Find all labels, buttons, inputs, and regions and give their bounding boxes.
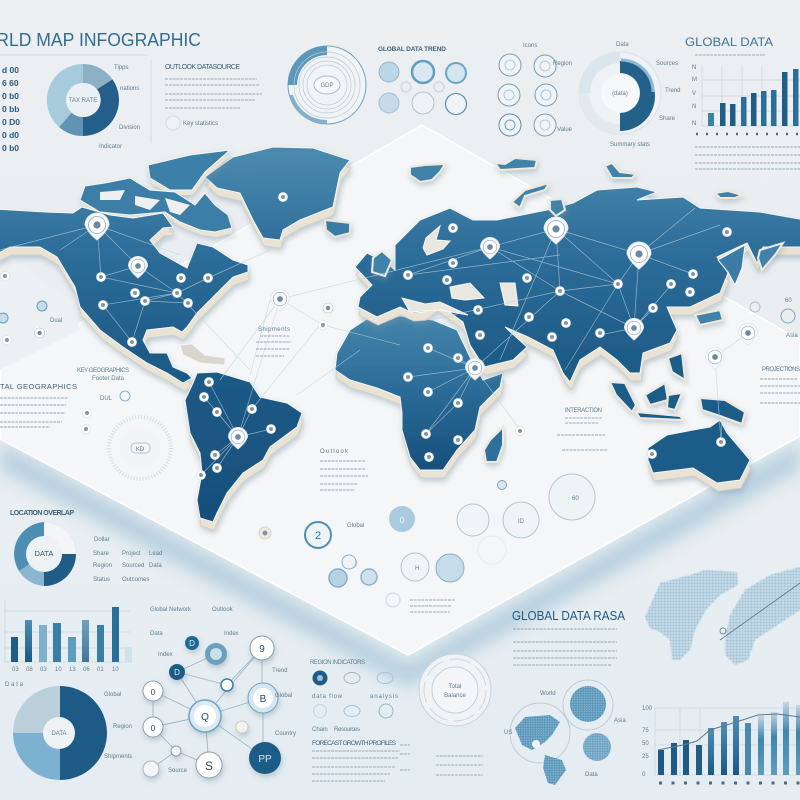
network diagram: Source [168, 768, 188, 774]
text block: top right [695, 147, 800, 169]
network diagram: S [205, 759, 213, 773]
legend: lower-left donut [93, 537, 162, 583]
radial chart: right: Share [659, 116, 676, 122]
donut chart: lower-left [14, 522, 76, 586]
bar chart: top right [692, 55, 800, 134]
legend: lower-left donut: Sourced [122, 563, 144, 569]
ring chart: lower centre: Balance [444, 693, 467, 699]
network diagram: 0 [151, 688, 156, 697]
donut chart: TAX RATE [69, 98, 97, 104]
icons: far east: 60 [785, 298, 792, 304]
radial chart: right: Sources [656, 61, 678, 67]
radial chart: right: Data [616, 42, 629, 48]
bubble group: lower paper: 0 [400, 516, 405, 525]
islands: Europe north and Japan [372, 158, 783, 325]
bar chart: top right: V [692, 91, 696, 97]
icon group: six rings [498, 43, 557, 136]
dotted circle [109, 417, 171, 479]
legend: lower-left donut: Project [122, 551, 141, 557]
bar chart: top right: N [692, 121, 696, 127]
radial chart: right [553, 42, 680, 148]
bar chart: lower-left [5, 600, 132, 673]
network diagram: Trend [272, 668, 287, 674]
bubble group: lower paper [259, 506, 415, 607]
network diagram [143, 607, 296, 778]
radial chart: right: Region [553, 61, 572, 67]
continent: Arctic islands [80, 150, 350, 237]
paper sheet [0, 125, 800, 655]
network lines: Americas [0, 225, 490, 475]
panel: top-left donut: Indicator [99, 144, 122, 150]
panel: lower icon list: Chain [312, 727, 328, 733]
icon list: d 00 [2, 65, 19, 75]
bar chart: lower-left: 01 [97, 667, 104, 673]
inland seas [402, 226, 745, 315]
radial chart: right: Value [557, 127, 573, 133]
left side icons: Dual [50, 318, 62, 324]
text block: left geographic: TAL GEOGRAPHICS [0, 382, 77, 391]
ring group: lower paper right: 60 [572, 496, 579, 502]
donut chart: lower-left: DATA [35, 549, 53, 558]
pie chart: lower-left: Global [104, 692, 121, 698]
network diagram: Outlook [212, 607, 234, 613]
text block: left geographic [0, 368, 129, 427]
icon list: 0 D0 [2, 117, 20, 127]
panel: top-left donut [0, 55, 151, 153]
text block: Indian Ocean: INTERACTION [565, 408, 602, 414]
text block: top-left outlook: Key statistics [183, 121, 218, 127]
bar chart: top right: N [692, 65, 696, 71]
legend: lower-left donut: Lead [149, 551, 162, 557]
legend: lower-left donut: Data [149, 563, 162, 569]
network diagram: PP [258, 754, 272, 765]
icon group: six rings: Icons [523, 43, 537, 49]
ring chart: lower centre: Total [449, 684, 461, 690]
icon list: 6 60 [2, 78, 19, 88]
text block: top-left outlook [165, 64, 262, 130]
bar chart: lower-left: 03 [40, 667, 47, 673]
text block: east: PROJECTIONS [762, 367, 800, 373]
pie chart: lower-left [5, 682, 132, 780]
icon group: top middle [378, 46, 466, 114]
ring group: lower paper right: ID [518, 519, 525, 525]
text block: left geographic: Footer Data [92, 376, 125, 382]
bubble group: lower paper: Global [347, 523, 364, 529]
text block: mid Atlantic [256, 327, 291, 356]
icon list: 0 b0 [2, 143, 19, 153]
continent: North America [0, 207, 249, 391]
panel: lower icon list [310, 660, 400, 781]
ocean pins [270, 289, 799, 585]
pie chart: lower-left: Data [5, 682, 24, 688]
bar chart: lower-right [642, 702, 800, 783]
text block: global data [513, 629, 617, 665]
icons: far east [750, 298, 798, 339]
network diagram: Index [224, 631, 239, 637]
text block: mid Atlantic: Shipments [258, 327, 290, 333]
network diagram: D [189, 639, 195, 648]
text block: south Atlantic [320, 449, 368, 490]
left side icons: DUL [100, 396, 113, 402]
mini globes: Asia [614, 718, 626, 724]
network diagram: 9 [259, 644, 265, 655]
map pins: North America [85, 192, 288, 347]
heading: lower-left donut: LOCATION OVERLAP [10, 510, 74, 517]
legend: lower-left donut: Dollar [94, 537, 110, 543]
text block: south Atlantic: Outlook [320, 449, 349, 455]
panel: top-left donut: Division [119, 125, 140, 131]
islands: Southeast Asia [610, 353, 745, 424]
bar chart: lower-left: 10 [112, 667, 119, 673]
text block: east [760, 367, 800, 403]
mini globes: World [540, 691, 556, 697]
text block: left geographic: KEY GEOGRAPHICS [77, 368, 129, 374]
ring group: lower paper right: H [415, 566, 419, 572]
network diagram: Data [150, 631, 163, 637]
radial chart: left: GDP [320, 83, 334, 89]
bar chart: top right: M [692, 77, 697, 83]
donut chart [47, 64, 119, 136]
map pins: Eurasia [403, 217, 732, 342]
text block: lower paper [410, 600, 455, 612]
ring group: lower paper right [401, 474, 595, 582]
mini globes: Data [585, 772, 598, 778]
paper shadow [0, 442, 800, 688]
bar chart: lower-left: 10 [55, 667, 62, 673]
panel: lower icon list: data flow [312, 694, 343, 700]
pie chart: lower-left: DATA [51, 731, 67, 737]
network lines: Eurasia and Africa [408, 208, 748, 442]
legend: lower-left donut: Status [93, 577, 110, 583]
legend: lower-left donut: Region [93, 563, 112, 569]
icon group: top middle: GLOBAL DATA TREND [378, 46, 446, 53]
radial chart: right: Trend [665, 88, 680, 94]
icons: far east: Asia [786, 333, 798, 339]
bar chart: lower-right: 100 [642, 706, 653, 712]
island: Madagascar [484, 427, 503, 462]
bar chart: lower-left: 06 [83, 667, 90, 673]
bar chart: lower-right: 25 [642, 754, 649, 760]
bar chart: lower-right: 0 [642, 772, 646, 778]
bubble group: lower paper: 2 [315, 530, 321, 542]
radial chart: right: Summary stats [610, 142, 650, 148]
Caribbean islands [180, 344, 225, 365]
heading: global data: GLOBAL DATA RASA [512, 609, 626, 623]
pie chart: lower-left: Region [113, 724, 132, 730]
pie chart: lower-left: Shipments [104, 754, 132, 760]
text block: lower centre [400, 745, 483, 775]
bar chart: lower-right: 50 [642, 741, 649, 747]
map pins: Africa and Australia [403, 343, 726, 462]
panel: lower icon list: REGION INDICATORS [310, 660, 365, 666]
dotted circle: KD [136, 447, 145, 453]
icon list: 0 bb [2, 104, 19, 114]
bar chart: lower-left: 08 [26, 667, 33, 673]
left side icons [0, 271, 130, 434]
panel: lower icon list: Resources [334, 727, 360, 733]
text block: top-left outlook: OUTLOOK DATASOURCE [165, 64, 240, 71]
network diagram: 0 [151, 724, 156, 733]
icon list [2, 65, 20, 153]
bar chart: lower-left: 13 [69, 667, 76, 673]
network diagram: Global [275, 693, 292, 699]
icon list: 0 d0 [2, 130, 19, 140]
mini globes [504, 680, 626, 785]
network diagram: B [260, 694, 267, 705]
continent: Africa [335, 316, 504, 478]
continent: Australia [648, 420, 751, 491]
network diagram: Index [158, 652, 173, 658]
continent: Greenland [205, 147, 351, 248]
continent: Eurasia [355, 187, 800, 390]
bar chart: lower-left: 03 [12, 667, 19, 673]
bar chart: top right: N [692, 104, 696, 110]
panel: lower icon list: analysis [370, 694, 398, 700]
continent: South America [185, 372, 303, 530]
network diagram: Q [201, 712, 209, 723]
panel: top-left donut: nations [120, 86, 139, 92]
radial chart: right: (data) [612, 91, 628, 97]
legend: lower-left donut: Outcomes [122, 577, 149, 583]
legend: lower-left donut: Share [93, 551, 110, 557]
map pins: South America [196, 377, 276, 480]
bar chart: lower-right: 75 [642, 728, 649, 734]
heading: global data: GLOBAL DATA [685, 35, 773, 49]
network diagram: Country [275, 731, 296, 737]
ring chart: lower centre [419, 654, 491, 726]
network diagram: Global Network [150, 607, 192, 613]
mini globes: US [504, 730, 512, 736]
left fold panel [0, 250, 80, 370]
network diagram: D [174, 668, 180, 677]
icon list: 0 b0 [2, 91, 19, 101]
panel: lower icon list: FORECAST GROWTH PROFILES [312, 740, 397, 747]
radial chart: left [288, 46, 366, 124]
dotted world map [645, 567, 800, 665]
panel: top-left donut: Tipps [114, 65, 128, 71]
text block: Indian Ocean [557, 408, 608, 450]
